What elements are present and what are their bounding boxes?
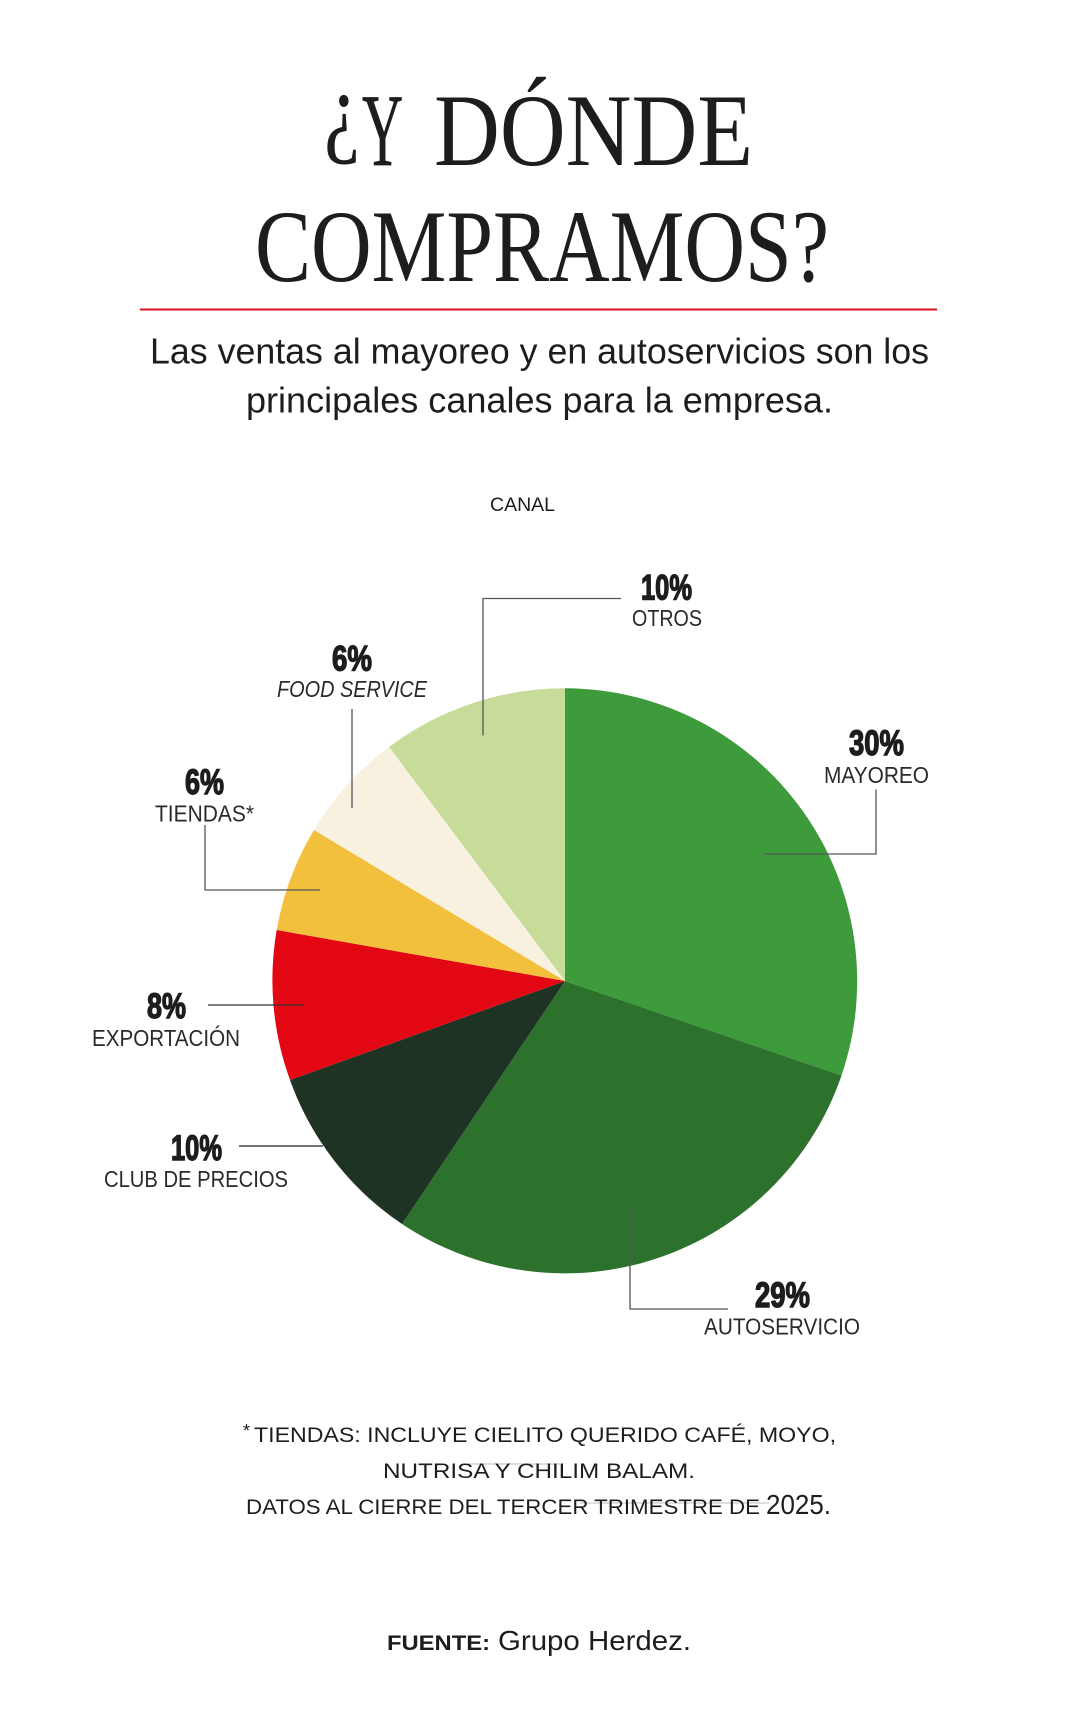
slice: autoservicio 29% — [402, 981, 842, 1273]
label: autoservicio: AUTOSERVICIO — [704, 1314, 860, 1340]
subtitle: principales canales para la empresa. — [246, 380, 833, 420]
label: mayoreo — [764, 724, 929, 854]
label: club de precios — [104, 1129, 323, 1192]
label: food service: 6% — [332, 640, 372, 678]
slice: mayoreo 30% — [565, 688, 857, 1076]
label: exportación: 8% — [147, 987, 186, 1026]
label: exportación — [92, 987, 304, 1051]
footnote — [243, 1421, 836, 1520]
subtitle: Las ventas al mayoreo y en autoservicios son los — [150, 330, 929, 372]
footnote: TIENDAS: INCLUYE CIELITO QUERIDO CAFÉ, MOYO, — [254, 1424, 836, 1447]
source: Grupo Herdez. — [498, 1625, 691, 1656]
footnote: NUTRISA Y CHILIM BALAM. — [383, 1460, 695, 1483]
footnote: * — [243, 1421, 250, 1441]
label: otros: OTROS — [632, 605, 702, 631]
subtitle — [150, 330, 929, 420]
footnote: DATOS AL CIERRE DEL TERCER TRIMESTRE DE — [246, 1496, 760, 1519]
slice: exportación 8% — [272, 930, 565, 1080]
pie chart — [272, 688, 857, 1273]
title: DÓNDE — [434, 74, 753, 188]
label: otros — [483, 568, 702, 736]
slice: otros 10% — [389, 688, 565, 981]
title: COMPRAMOS? — [255, 190, 829, 304]
label: mayoreo: 30% — [849, 724, 904, 763]
label: tiendas — [155, 763, 320, 890]
label: tiendas: 6% — [185, 763, 224, 802]
chart heading: canal: CANAL — [490, 495, 555, 516]
source — [387, 1625, 691, 1656]
label: otros: 10% — [641, 568, 692, 608]
label: mayoreo: MAYOREO — [824, 762, 929, 788]
footnote: 2025. — [766, 1489, 831, 1520]
label: exportación: EXPORTACIÓN — [92, 1025, 240, 1051]
title: Y — [362, 74, 403, 188]
label: club de precios: 10% — [171, 1129, 222, 1168]
slice: club de precios 10% — [290, 981, 565, 1224]
slice: tiendas 6% — [277, 830, 565, 981]
title: ¿ — [324, 52, 360, 166]
label: club de precios: CLUB DE PRECIOS — [104, 1166, 288, 1192]
source: FUENTE: — [387, 1632, 490, 1655]
red divider — [140, 308, 937, 310]
slice: food service 6% — [314, 747, 565, 981]
label: food service — [277, 640, 428, 808]
label: food service: FOOD SERVICE — [277, 676, 428, 702]
title — [255, 52, 829, 304]
label: tiendas: TIENDAS* — [155, 800, 254, 826]
label: autoservicio — [630, 1207, 860, 1340]
label: autoservicio: 29% — [755, 1276, 810, 1315]
